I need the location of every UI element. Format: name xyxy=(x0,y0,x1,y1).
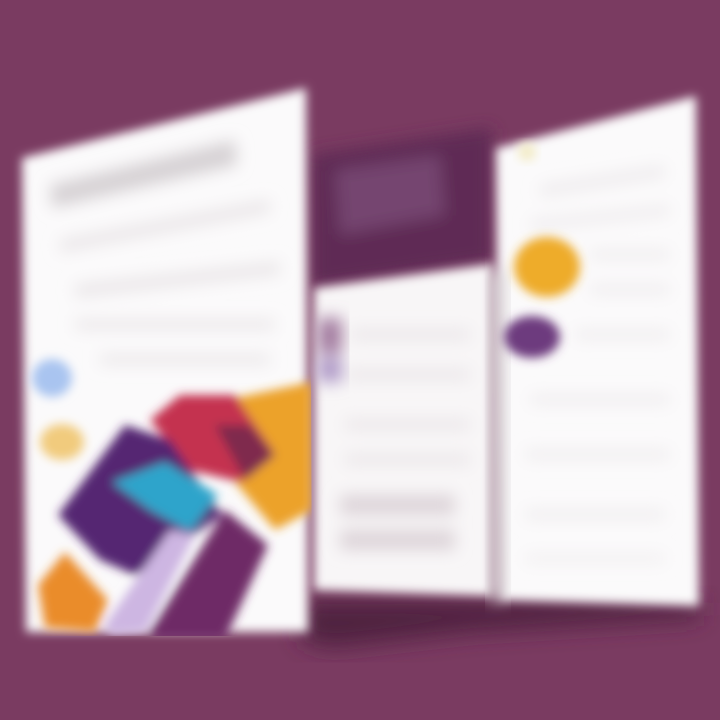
icon: yellow badge xyxy=(40,424,84,460)
icon: blue badge xyxy=(32,359,72,397)
panel: right page xyxy=(496,96,699,606)
icon: orange circle xyxy=(514,237,580,297)
center page text lines xyxy=(340,330,470,550)
dark red fold xyxy=(215,425,275,480)
page shadow xyxy=(300,600,700,648)
lilac strip xyxy=(105,530,195,635)
red block xyxy=(150,395,272,482)
right page text lines xyxy=(525,165,670,562)
orange bottom block xyxy=(38,552,108,632)
orange block xyxy=(215,382,312,530)
purple block xyxy=(58,425,222,575)
teal block xyxy=(112,462,218,532)
panel: center white page xyxy=(314,264,492,596)
icon: purple badge xyxy=(504,316,560,358)
graphic: colourful ribbon shapes xyxy=(38,382,312,640)
panel: left page xyxy=(22,88,308,632)
header title block xyxy=(335,155,445,235)
left page heading and text lines xyxy=(50,140,280,364)
right page spine shading xyxy=(490,270,506,600)
plum strip xyxy=(150,510,268,640)
center page icons xyxy=(318,318,342,382)
icon: small yellow marker xyxy=(518,143,536,161)
panel: center cover dark header xyxy=(312,128,492,288)
